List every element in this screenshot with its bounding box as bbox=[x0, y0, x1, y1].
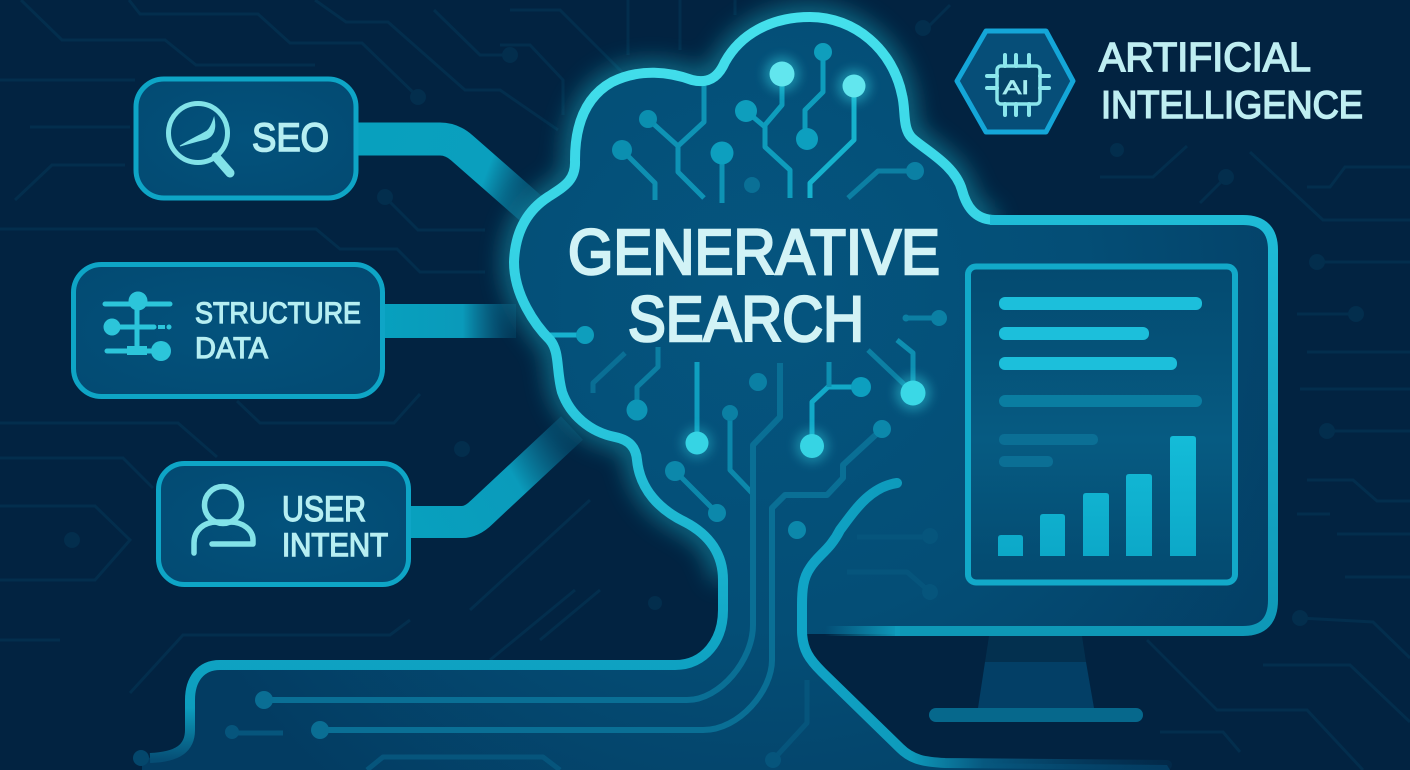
icon: AI chip hexagon bbox=[957, 31, 1073, 132]
badge: artificial intelligence bbox=[957, 31, 1363, 132]
background circuit nodes bbox=[64, 20, 1364, 626]
title: generative search: GENERATIVE bbox=[568, 216, 940, 288]
panel: SEO bbox=[136, 79, 356, 198]
connector: SEO to brain bbox=[350, 139, 535, 212]
brain outline bbox=[150, 17, 995, 758]
structure data label: STRUCTURE bbox=[195, 297, 361, 330]
connector: user intent to brain bbox=[405, 428, 572, 522]
tree trunk right branch bbox=[802, 483, 1167, 765]
title: generative search bbox=[568, 216, 940, 355]
user intent label: USER bbox=[282, 490, 366, 529]
monitor frame bbox=[895, 220, 1273, 631]
monitor bbox=[825, 220, 1273, 722]
monitor frame fading edge bbox=[825, 626, 900, 636]
user intent label bbox=[282, 490, 388, 563]
icon: AI chip hexagon: AI bbox=[1003, 78, 1029, 99]
icon: user bbox=[194, 486, 253, 553]
brain and monitor filled background bbox=[142, 17, 1273, 770]
panel: structure data bbox=[74, 264, 382, 396]
glow around brain bbox=[514, 17, 995, 580]
panel: user intent bbox=[158, 464, 408, 584]
user intent label: INTENT bbox=[282, 527, 388, 563]
artificial intelligence label bbox=[1099, 34, 1363, 127]
artificial intelligence label: ARTIFICIAL bbox=[1099, 34, 1311, 80]
screen panel bbox=[968, 266, 1235, 582]
icon: magnifier with trend bbox=[168, 104, 230, 173]
circuit traces inside the brain bbox=[232, 52, 939, 770]
SEO label: SEO bbox=[252, 116, 329, 160]
structure data label: DATA bbox=[195, 332, 268, 365]
title: generative search: SEARCH bbox=[628, 283, 864, 355]
screen text lines bbox=[999, 297, 1202, 467]
structure data label bbox=[195, 297, 361, 365]
artificial intelligence label: INTELLIGENCE bbox=[1101, 84, 1363, 127]
monitor base bbox=[929, 708, 1143, 722]
monitor stand bbox=[978, 636, 1094, 708]
connector: structure data to brain bbox=[378, 304, 516, 338]
circuit nodes inside the brain bbox=[133, 43, 947, 768]
screen bar chart bbox=[998, 436, 1196, 556]
icon: structure tree bbox=[104, 292, 172, 361]
